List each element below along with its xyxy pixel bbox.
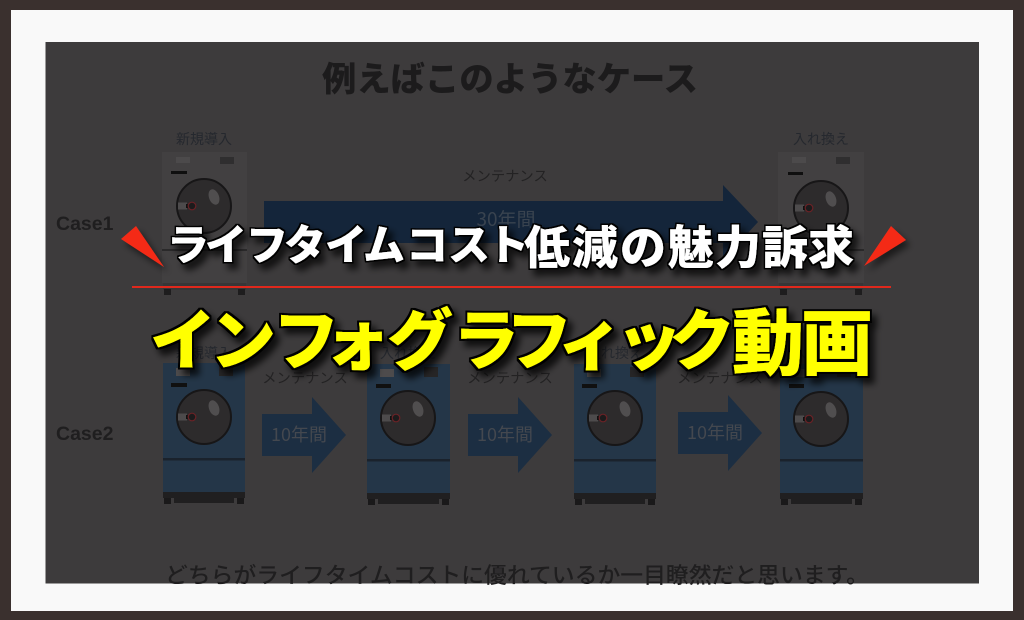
label: maintenance 1: メンテナンス — [262, 367, 348, 388]
machine: case 2 first — [163, 363, 245, 504]
machine: case 1 left — [162, 152, 247, 295]
arrow: 10 years 3: 10年間 — [687, 419, 743, 445]
arrow: 10 years 2 — [468, 397, 552, 473]
label: replacement case 2: 入れ換え — [380, 343, 436, 363]
slide footer text: どちらがライフタイムコストに優れているか一目瞭然だと思います。 — [165, 558, 869, 590]
machine: case 2 fourth — [780, 364, 863, 505]
label: Case1: Case1 — [56, 213, 114, 235]
arrow: 10 years 3 — [678, 395, 762, 471]
label: maintenance case 1: メンテナンス — [462, 165, 548, 186]
headline: white: ライフタイムコスト — [167, 212, 529, 273]
label: maintenance 3: メンテナンス — [677, 367, 763, 388]
machine: case 2 third — [574, 364, 656, 505]
arrow: 10 years 2: 10年間 — [477, 421, 533, 447]
slide heading: 例えばこのようなケース — [322, 52, 698, 101]
machine: case 1 right — [778, 152, 864, 295]
label: replacement case 1: 入れ換え — [793, 129, 849, 149]
label: replacement case 2 fourth: 入れ換え — [793, 343, 849, 363]
label: maintenance 2: メンテナンス — [467, 367, 553, 388]
machine: case 2 second — [367, 364, 450, 505]
arrow: 10 years 1: 10年間 — [271, 421, 327, 447]
label: new install case 1: 新規導入 — [176, 129, 232, 149]
headline: yellow: インフォグラフィック — [150, 288, 735, 384]
arrow: 10 years 1 — [262, 397, 346, 473]
label: replacement case 2 third: 入れ換え — [587, 343, 643, 363]
icon: right red pointer — [864, 226, 906, 266]
headline: white: 低減の魅力訴求 — [524, 212, 854, 278]
arrow: 30 years — [264, 185, 758, 260]
label: new install case 2: 新規導入 — [176, 343, 232, 363]
arrow: 30 years: 30年間 — [476, 205, 536, 232]
headline: yellow: 動画 — [732, 285, 873, 390]
divider: red rule — [132, 286, 891, 288]
icon: left red pointer — [121, 226, 164, 267]
label: Case2: Case2 — [56, 423, 114, 445]
